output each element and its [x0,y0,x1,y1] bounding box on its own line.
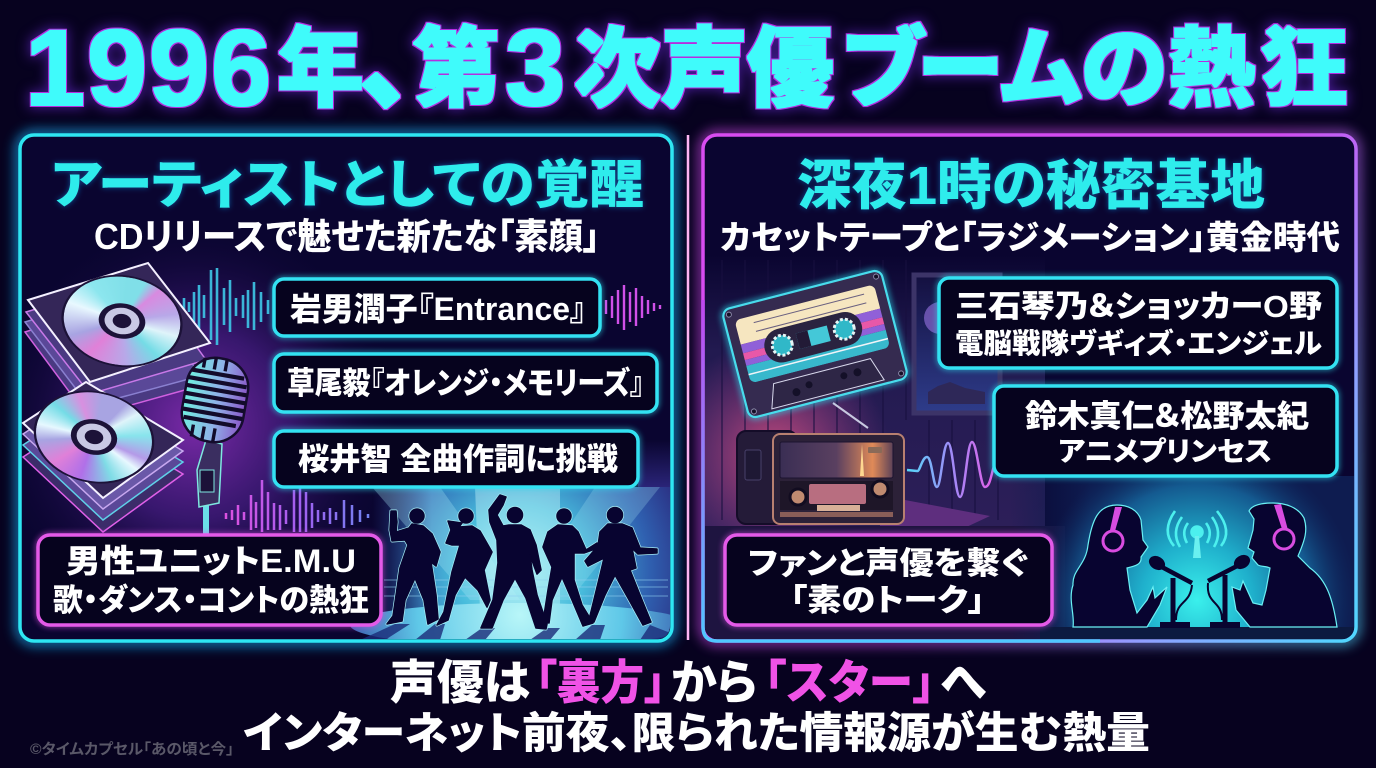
chip: Iwao Junko: 岩男潤子『Entrance』 [290,291,586,327]
chip: Sakurai Tomo: 桜井智 全曲作詞に挑戦 [298,442,618,477]
room wall [705,255,1045,639]
podcast backdrop [1032,476,1354,627]
panel heading: 深夜1時の秘密基地 [797,156,1265,216]
title: 次声優ブームの熱狂 [574,21,1348,118]
icon: microphone [177,353,253,536]
window [914,275,1000,413]
conclusion line 1: 「スター」 [764,656,935,709]
icon: radio [737,403,904,524]
chip: Suzuki Masahito [994,386,1337,476]
room scene [705,255,1354,639]
chip: E.M.U [38,535,381,625]
icon: lower CD stack [23,380,183,532]
panel: artist awakening [20,135,690,647]
conclusion line 2: インターネット前夜、限られた情報源が生む熱量 [243,709,1150,758]
copyright: ©タイムカプセル「あの頃と今」 [30,740,234,758]
panel background [703,135,1356,641]
chip: bare talk: 「素のトーク」 [790,583,985,618]
chip: Kusao Takeshi [274,354,657,412]
conclusion line 1: から [671,656,757,709]
panel glow [20,135,672,641]
panel border [20,135,672,641]
title: 年 [277,21,364,118]
chip: Suzuki Masahito: アニメプリンセス [1058,437,1272,467]
title: 1996 [25,7,271,128]
icon: signal tower [1168,511,1226,558]
panel glow [703,135,1356,641]
conclusion line 1: 「裏方」 [535,656,666,709]
sound wave: cyan [184,268,268,345]
panel background [20,135,672,641]
chip: Sakurai Tomo [274,431,638,487]
panel subheading: CDリリースで魅せた新たな「素顔」 [94,216,600,257]
title: 第 [413,21,500,118]
icon: desk microphones [1147,553,1252,628]
chip: Kusao Takeshi: 草尾毅『オレンジ・メモリーズ』 [287,366,644,401]
illustration background [22,240,690,647]
chip: bare talk: ファンと声優を繋ぐ [748,546,1028,581]
panel border [703,135,1356,641]
divider [684,135,692,640]
chip: Mitsuishi Kotono: 電脳戦隊ヴギィズ・エンジェル [955,327,1322,359]
wave: radio signal [907,442,994,497]
antenna [833,403,868,428]
chip: E.M.U: 男性ユニットE.M.U [66,543,356,579]
icon: upper CD stack [25,263,210,417]
chip: Suzuki Masahito: 鈴木真仁＆松野太紀 [1025,399,1309,434]
icon: man silhouette with headset [1232,503,1337,627]
chip: Mitsuishi Kotono: 三石琴乃＆ショッカーO野 [955,289,1322,324]
title: 、 [359,2,467,123]
purple glow behind discs [28,257,363,534]
chip: Mitsuishi Kotono [939,278,1337,368]
sound wave: lower [226,480,368,532]
title: 3 [505,7,565,128]
icon: five performer silhouettes [387,495,657,629]
icon: cassette tape [722,269,908,419]
chip: Iwao Junko [274,279,600,336]
panel heading: アーティストとしての覚醒 [51,157,644,215]
sound wave: magenta [606,285,660,330]
conclusion line 1: へ [940,656,986,709]
panel subheading: カセットテープと「ラジメーション」黄金時代 [720,219,1340,256]
panel: midnight secret base [703,135,1356,641]
chip: bare talk [725,535,1052,625]
table [880,500,990,526]
chip: E.M.U: 歌・ダンス・コントの熱狂 [53,583,369,618]
icon: woman silhouette with headset [1071,505,1167,627]
conclusion line 1 [390,656,986,709]
conclusion line 1: 声優は [390,656,530,709]
stage scene [350,445,670,639]
